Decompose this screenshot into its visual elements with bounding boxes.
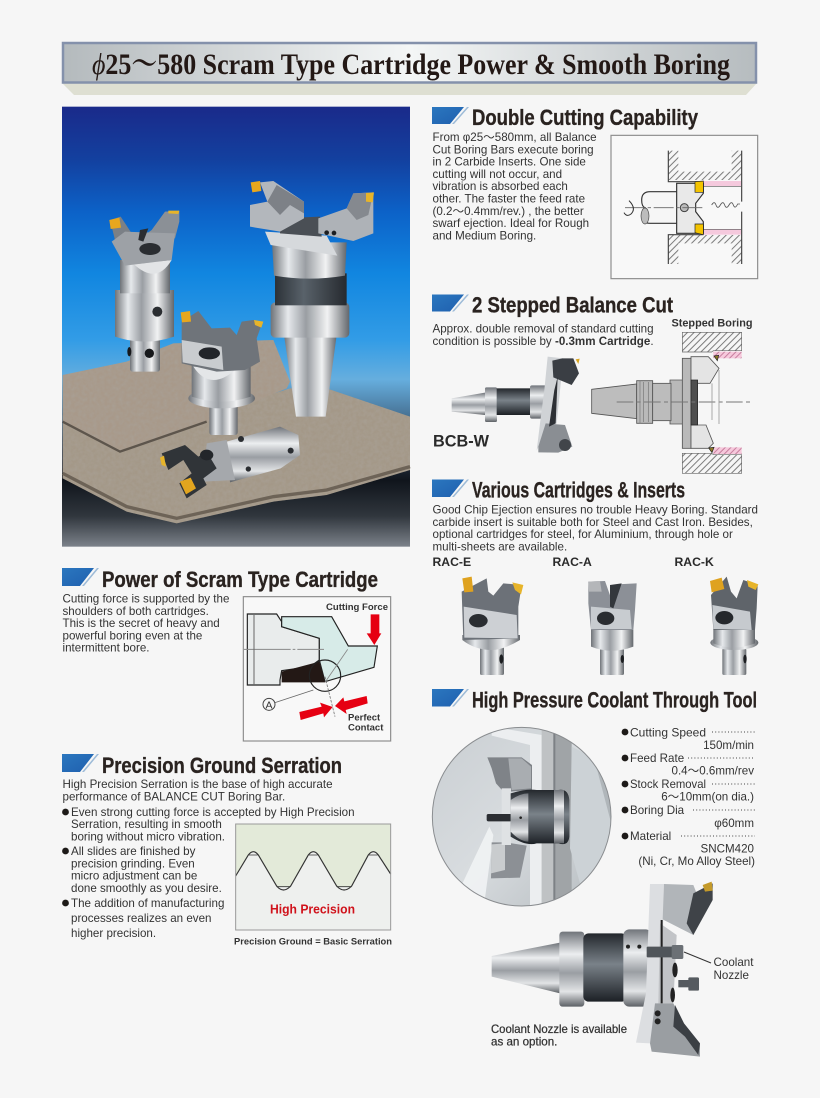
heading: Various Cartridges & Inserts bbox=[472, 478, 685, 502]
section: Precision Ground Serration bbox=[62, 753, 355, 940]
icon: blue tab bbox=[432, 294, 469, 312]
body text: condition is possible by -0.3mm Cartridge. bbox=[432, 335, 654, 348]
spec: Stock Removal bbox=[622, 778, 755, 804]
bullet: strong cutting force: Serration, resulting in smooth bbox=[71, 818, 222, 831]
diagram: serration profile bbox=[236, 824, 391, 930]
section: 2 Stepped Balance Cut bbox=[432, 292, 673, 348]
label: A marker: A bbox=[266, 700, 273, 712]
body text: other. The faster the feed rate bbox=[432, 192, 585, 206]
stone slabs bbox=[63, 340, 410, 523]
tool: lying cartridge bar bbox=[160, 427, 300, 498]
photo: BCB-W tool bbox=[452, 357, 580, 453]
label: RAC-K: RAC-K bbox=[674, 555, 714, 569]
tool: left cartridge bar bbox=[109, 211, 179, 372]
section: Power of Scram Type Cartridge bbox=[62, 567, 378, 655]
bullet: strong cutting force: Even strong cutting force is accepted by High Precision bbox=[71, 806, 355, 819]
body text: performance of BALANCE CUT Boring Bar. bbox=[62, 790, 285, 803]
body text: (0.2〜0.4mm/rev.) , the better bbox=[432, 205, 584, 218]
spec: Material: SNCM420 bbox=[701, 842, 754, 856]
body text bbox=[62, 592, 229, 655]
tool: large BT taper bar bbox=[250, 181, 374, 417]
product photo: four boring tools on stone bbox=[62, 107, 410, 547]
callout: Coolant Nozzle: Coolant bbox=[714, 956, 754, 969]
spec: Feed Rate: 0.4〜0.6mm/rev bbox=[672, 764, 754, 778]
heading: Precision Ground Serration bbox=[102, 753, 342, 778]
spec: Stock Removal: 6〜10mm(on dia.) bbox=[661, 790, 754, 804]
body text: powerful boring even at the bbox=[62, 629, 202, 642]
bullet: precision grinding: micro adjustment can be bbox=[71, 870, 197, 883]
body text: vibration is absorbed each bbox=[432, 180, 568, 193]
label: Cutting Force: Cutting Force bbox=[326, 602, 388, 613]
section: Double Cutting Capability bbox=[432, 105, 698, 242]
heading: Power of Scram Type Cartridge bbox=[102, 567, 378, 592]
body text: carbide insert is suitable both for Steel and Cast Iron. Besides, bbox=[432, 516, 753, 529]
spec: Feed Rate: Feed Rate bbox=[630, 752, 684, 765]
bullet: precision grinding: All slides are finished by bbox=[71, 845, 196, 858]
label: RAC-E: RAC-E bbox=[432, 555, 471, 569]
note: coolant nozzle option: Coolant Nozzle is available bbox=[491, 1023, 627, 1036]
photo: tool with coolant nozzle bbox=[492, 882, 713, 1057]
spec: Boring Dia: Boring Dia bbox=[630, 804, 685, 817]
heading: 2 Stepped Balance Cut bbox=[472, 292, 673, 318]
body text: Cutting force is supported by the bbox=[62, 592, 229, 606]
label: High Precision: High Precision bbox=[270, 902, 355, 916]
diagram: cartridge cutting force bbox=[243, 597, 391, 741]
body text: optional cartridges for steel, for Aluminium, through hole or bbox=[432, 528, 733, 541]
body text: shoulders of both cartridges. bbox=[62, 605, 209, 618]
body text bbox=[432, 131, 597, 242]
bullet: precision grinding bbox=[62, 845, 222, 895]
spec: Boring Dia: φ60mm bbox=[714, 817, 754, 830]
label: Perfect Contact bbox=[348, 712, 384, 734]
callout: Coolant Nozzle bbox=[684, 952, 754, 982]
body text bbox=[432, 322, 654, 348]
body text: in 2 Carbide Inserts. One side bbox=[432, 156, 586, 169]
spec: Cutting Speed bbox=[622, 726, 755, 752]
bullet: strong cutting force: boring without micro vibration. bbox=[71, 830, 225, 843]
body text: multi-sheets are available. bbox=[432, 540, 567, 553]
body text: From φ25〜580mm, all Balance bbox=[432, 131, 597, 144]
spec: Stock Removal: Stock Removal bbox=[630, 778, 706, 791]
body text: and Medium Boring. bbox=[432, 229, 536, 242]
photo: RAC-A cartridge bbox=[588, 581, 637, 675]
icon: blue tab bbox=[62, 568, 99, 586]
spec: Cutting Speed: 150m/min bbox=[703, 739, 754, 752]
photo: RAC-K cartridge bbox=[710, 577, 758, 675]
icon: blue tab bbox=[432, 480, 469, 497]
bullet: manufacturing processes: processes realizes an even bbox=[71, 912, 212, 925]
icon: blue tab bbox=[432, 107, 469, 124]
icon: cutting force arrow bbox=[367, 614, 381, 645]
body text: intermittent bore. bbox=[62, 642, 150, 655]
bullet: strong cutting force bbox=[62, 806, 355, 843]
spec: Material: Material bbox=[630, 830, 671, 843]
title: ϕ25〜580 Scram Type Cartridge Power & Smooth Boring bbox=[92, 48, 730, 81]
body text: cutting will not occur, and bbox=[432, 168, 562, 181]
body text: Approx. double removal of standard cutting bbox=[432, 322, 654, 336]
bullet: manufacturing processes bbox=[62, 897, 224, 940]
section: Various Cartridges & Inserts bbox=[432, 478, 758, 553]
callout: Coolant Nozzle: Nozzle bbox=[714, 969, 749, 982]
bullet: precision grinding: done smoothly as you desire. bbox=[71, 882, 222, 895]
spec: Material: (Ni, Cr, Mo Alloy Steel) bbox=[638, 855, 755, 868]
spec: Boring Dia bbox=[622, 804, 755, 830]
spec: Feed Rate bbox=[622, 752, 755, 778]
body text: swarf ejection. Ideal for Rough bbox=[432, 217, 589, 230]
heading: Double Cutting Capability bbox=[472, 105, 698, 130]
bullet: manufacturing processes: The addition of manufacturing bbox=[71, 897, 224, 910]
bullet: manufacturing processes: higher precision. bbox=[71, 927, 156, 940]
body text: High Precision Serration is the base of high accurate bbox=[62, 778, 333, 791]
spec: Cutting Speed: Cutting Speed bbox=[630, 726, 706, 740]
label: BCB-W: BCB-W bbox=[433, 432, 490, 450]
diagram: stepped boring cross-section bbox=[592, 332, 751, 473]
bullet: precision grinding: precision grinding. Even bbox=[71, 857, 195, 870]
label: RAC-A: RAC-A bbox=[552, 555, 592, 569]
icon: blue tab bbox=[432, 689, 469, 706]
photo: RAC-E cartridge bbox=[462, 577, 523, 675]
caption: Precision Ground = Basic Serration: Precision Ground = Basic Serration bbox=[234, 936, 392, 948]
body text: Good Chip Ejection ensures no trouble Heavy Boring. Standard bbox=[432, 504, 758, 516]
tool: centre cartridge bar bbox=[181, 311, 263, 435]
icon: perfect contact arrow right bbox=[335, 696, 368, 714]
body text bbox=[432, 504, 758, 553]
body text: This is the secret of heavy and bbox=[62, 617, 220, 630]
body text: Cut Boring Bars execute boring bbox=[432, 143, 594, 156]
label: Perfect Contact: Perfect bbox=[348, 712, 381, 724]
label: Perfect Contact: Contact bbox=[348, 722, 384, 734]
icon: blue tab bbox=[62, 754, 99, 772]
spec: Material bbox=[622, 830, 755, 868]
photo: machining close-up circle bbox=[430, 725, 615, 910]
icon: perfect contact arrow left bbox=[299, 703, 333, 720]
list: cutting specifications bbox=[622, 726, 755, 868]
section: High Pressure Coolant Through Tool bbox=[432, 688, 757, 712]
note: coolant nozzle option: as an option. bbox=[491, 1036, 557, 1048]
label: Stepped Boring: Stepped Boring bbox=[672, 318, 752, 330]
title banner bbox=[62, 43, 757, 95]
body text bbox=[62, 778, 355, 940]
diagram: double cutting cross-section bbox=[611, 135, 758, 279]
note: coolant nozzle option bbox=[491, 1023, 627, 1048]
